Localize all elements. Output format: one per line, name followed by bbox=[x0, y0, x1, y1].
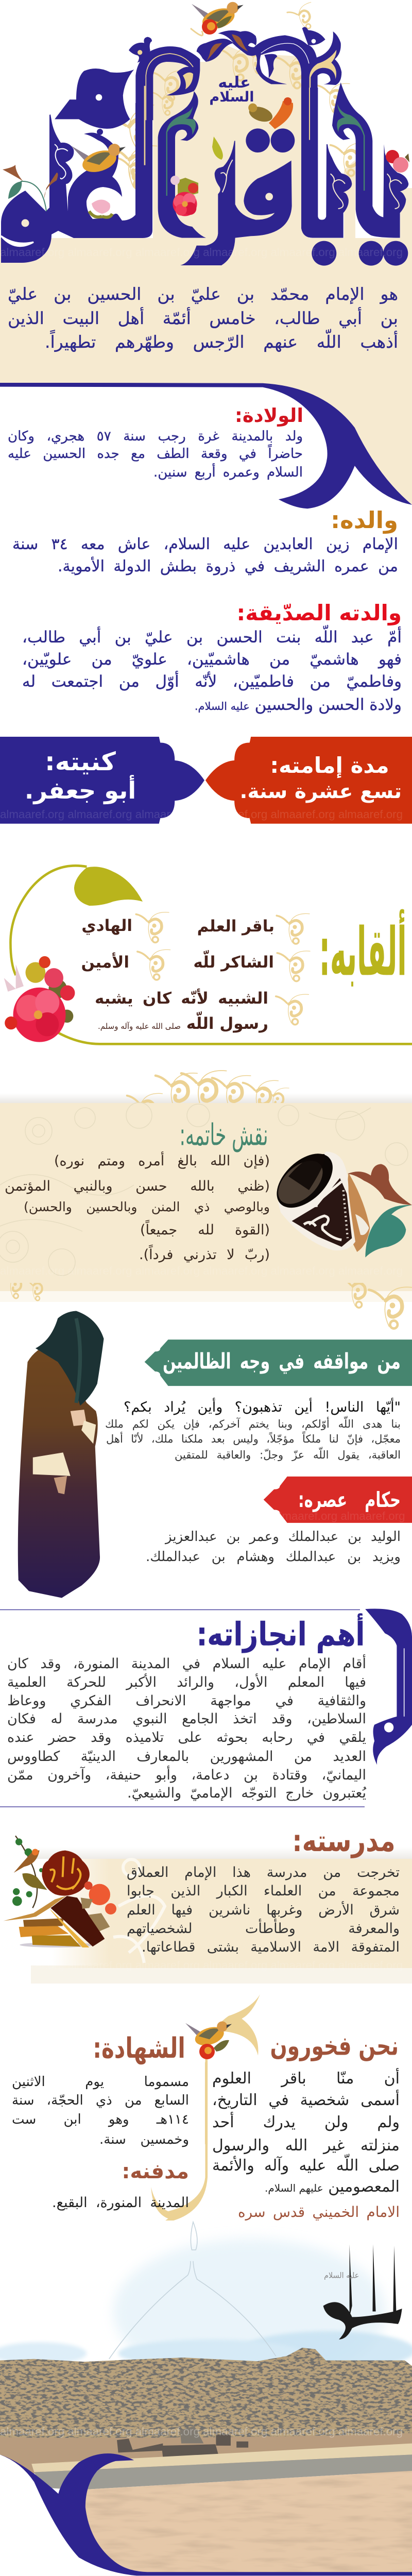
panel: achievements: يلقي في رحابه بحوثه على تلاميذه وقد حضر عنده bbox=[7, 1730, 366, 1745]
leaves bbox=[348, 1164, 412, 1205]
watermark: almaaref.org almaaref.org almaaref.org almaaref.org almaaref.org almaaref.org bbox=[0, 1959, 403, 1972]
sand bbox=[79, 2471, 412, 2575]
green banner bbox=[145, 1340, 412, 1386]
red banner bbox=[205, 737, 412, 824]
tan divider tail bbox=[151, 2057, 208, 2247]
panel: hero calligraphy and introduction: بن أبي طالب، خامس أئمّة أهل البيت الذين bbox=[8, 308, 398, 328]
panel: achievements bbox=[0, 1608, 412, 1807]
panel: ring inscription: وبالوصي ذي المنن وبالحسين والحسن) bbox=[24, 1199, 270, 1214]
panel: his school bbox=[0, 1824, 412, 1984]
panel: martyrdom, burial and pride: المعصومين عليهم السلام. bbox=[265, 2178, 400, 2196]
panel: titles: الشاكر للّه bbox=[193, 953, 274, 972]
panel: father bbox=[12, 506, 398, 575]
cream backdrop bbox=[0, 44, 412, 384]
ring text: (فإن الله بالغ أمره ومتم نوره) bbox=[54, 1153, 270, 1169]
alayhi al-salam inscription: السلام bbox=[209, 89, 254, 105]
letter group left bbox=[1, 103, 152, 263]
calligraphy bbox=[323, 2244, 402, 2340]
cream ground bbox=[0, 1103, 412, 1291]
panel: stances and rulers: ويزيد بن عبدالملك وهشام بن عبدالملك. bbox=[146, 1549, 401, 1565]
heading: ring inscription: نقش خاتمه: bbox=[180, 1118, 268, 1153]
panel: achievements: فيها المعلم الأول، والرائد الأكبر للحركة العلمية bbox=[7, 1674, 366, 1690]
heading: father: والده: bbox=[331, 506, 398, 534]
graves bbox=[117, 2426, 248, 2458]
alayhi al-salam inscription bbox=[209, 74, 254, 105]
panel: Baqi cemetery scene bbox=[0, 2221, 412, 2576]
olive frame bbox=[10, 866, 412, 1044]
white lower left bbox=[0, 2454, 136, 2575]
quote: "أيّها الناس! أين تذهبون؟ وأين يُراد بكم؟ bbox=[124, 1399, 401, 1415]
heading: stances: من مواقفه في وجه الظالمين bbox=[163, 1349, 401, 1375]
panel: stances and rulers: معجّل، فإنّ لنا ملكاً مؤجّلاً، وليس بعد ملكنا ملك، لأنّا أهل bbox=[106, 1433, 401, 1445]
watermark: almaaref.org almaaref.org almaaref.org almaaref.org almaaref.org almaaref.org bbox=[0, 2425, 403, 2438]
crown and arches bbox=[129, 27, 341, 120]
small bird and flower bbox=[185, 2021, 232, 2059]
birds and flowers bbox=[71, 2, 409, 217]
heading: burial: مدفنه: bbox=[122, 2160, 189, 2183]
panel: mother: ولادة الحسن والحسين عليه السلام. bbox=[195, 696, 402, 714]
big calligraphic letters bbox=[1, 27, 408, 266]
panel: achievements: يُعتبرون خارج التوجّه الإماميّ والشيعيّ. bbox=[127, 1785, 366, 1801]
panel: martyrdom, burial and pride: أسمى شخصية في التاريخ، bbox=[212, 2091, 400, 2109]
stone wall bbox=[0, 2348, 412, 2438]
panel: stances and rulers bbox=[10, 1283, 412, 1598]
heading: achievements: أهم انجازاته: bbox=[197, 1616, 365, 1653]
title items: باقر العلم bbox=[197, 917, 274, 936]
panel: stances and rulers: بنا هدى اللّه أوّلكم، وبنا يختم آخركم، فإن يكن لكم ملك bbox=[105, 1418, 401, 1430]
panel: martyrdom, burial and pride: السابع من ذي الحجّة، سنة bbox=[12, 2093, 189, 2108]
panel: titles: الشبيه لأنّه كان يشبه bbox=[95, 989, 268, 1008]
panel: titles bbox=[4, 865, 412, 1045]
father text: الإمام زين العابدين عليه السلام، عاش معه ٣٤ سنة bbox=[12, 535, 398, 553]
panel: kunya and imamate banners: تسع عشرة سنة. bbox=[240, 780, 402, 803]
panel: achievements: والثقافية في مواجهة الانحراف الفكري ووعاظ bbox=[7, 1693, 366, 1709]
panel: mother bbox=[22, 600, 402, 714]
curb bbox=[31, 2444, 412, 2472]
corner flourishes bbox=[1, 1273, 411, 1329]
letter ha bbox=[55, 69, 134, 129]
panel: ring inscription bbox=[0, 1070, 412, 1302]
panel: his school: المتفوقة الامة الاسلامية بشتى قطاعاتها. bbox=[142, 1939, 400, 1955]
panel: martyrdom, burial and pride: ولم ولن يدرك أحد bbox=[212, 2113, 400, 2131]
kunya: كنيته: bbox=[45, 747, 116, 776]
watermark: almaaref.org almaaref.org almaaref.org almaaref.org almaaref.org almaaref.org bbox=[0, 1264, 403, 1277]
olive leaf bbox=[74, 867, 143, 906]
figure in robe bbox=[18, 1311, 104, 1598]
watermark: almaaref.org almaaref.org almaaref.org almaaref.org almaaref.org almaaref.org bbox=[0, 808, 403, 821]
dome outline and spire bbox=[109, 2222, 276, 2359]
navy banner bbox=[0, 737, 204, 824]
red banner bbox=[264, 1477, 412, 1523]
white swirls bbox=[113, 1859, 165, 1963]
panel: hero calligraphy and introduction: أذهب اللّه عنهم الرّجس وطهّرهم تطهيراً. bbox=[45, 332, 398, 352]
panel: titles: الهادي bbox=[81, 917, 132, 935]
panel: martyrdom, burial and pride: ١١٤هـ وهو ابن ست bbox=[12, 2112, 189, 2127]
blue dome wash bbox=[0, 2239, 412, 2384]
panel: achievements: اليمانيّ، وقتادة بن دعامة، وأبو حنيفة، وآخرون ممّن bbox=[7, 1767, 366, 1783]
intro text: هو الإمام محمّد بن عليّ بن الحسين بن عليّ bbox=[8, 284, 398, 304]
heading: school: مدرسته: bbox=[292, 1824, 396, 1859]
watermark: almaaref.org almaaref.org almaaref.org almaaref.org almaaref.org almaaref.org bbox=[0, 246, 403, 259]
calligraphy: عليه السلام bbox=[324, 2271, 359, 2280]
shadow fade bbox=[0, 1093, 412, 1104]
burial text: المدينة المنورة، البقيع. bbox=[52, 2195, 189, 2211]
panel: titles: رسول اللّه صلى الله عليه وآله وسلم. bbox=[98, 1014, 268, 1033]
birth text: ولد بالمدينة غرة رجب سنة ٥٧ هجري، وكان bbox=[8, 429, 303, 444]
proud text: أن منّا باقر العلوم bbox=[212, 2070, 400, 2088]
navy swoosh bbox=[0, 2453, 412, 2575]
heading: rulers: حكام عصره: bbox=[298, 1487, 401, 1512]
panel: his school: مجموعة من العلماء الكبار الذين جابوا bbox=[127, 1883, 400, 1899]
middle hook bbox=[55, 86, 206, 238]
school text: تخرجت من مدرسة هذا الإمام العملاق bbox=[127, 1865, 400, 1880]
panel: ring inscription: (ظني بالله حسن وبالنبي المؤتمن bbox=[5, 1178, 270, 1194]
panel: achievements: العديد من المشهورين بالمعارف الدينيّة كطاووس bbox=[7, 1749, 366, 1765]
panel: his school: شرق الأرض وغربها ناشرين فيها العلم bbox=[127, 1902, 400, 1918]
panel shadows bbox=[31, 1847, 412, 1859]
navy corner ornament bbox=[365, 1609, 412, 1765]
cream panel bbox=[52, 1859, 412, 1968]
panel: birth bbox=[0, 383, 412, 509]
heading: birth: الولادة: bbox=[235, 404, 303, 427]
panel: martyrdom, burial and pride: وخمسين سنة. bbox=[99, 2132, 189, 2147]
heading: martyrdom: الشهادة: bbox=[93, 2032, 185, 2064]
ring bbox=[267, 1143, 412, 1258]
panel: achievements: السلاطين، وقد اتخذ الجامع النبوي مدرسة له فكان bbox=[7, 1711, 366, 1727]
attribution: الامام الخميني قدس سره bbox=[238, 2204, 400, 2221]
watermark: almaaref.org almaaref.org bbox=[273, 1510, 405, 1522]
panel: birth: حاضراً في وقعة الطف مع جده الحسين عليه bbox=[8, 446, 303, 462]
flower bouquet bbox=[4, 956, 75, 1042]
green leaf and brown sprig bbox=[3, 165, 58, 211]
heading: proud: نحن فخورون bbox=[270, 2031, 399, 2062]
background flourishes bbox=[107, 2, 366, 189]
navy crescent divider bbox=[0, 383, 412, 509]
road bbox=[34, 2454, 412, 2490]
flourish bullets bbox=[136, 912, 310, 1025]
panel: ring inscription: (القوة لله جميعاً) bbox=[140, 1222, 270, 1238]
imamate duration: مدة إمامته: bbox=[270, 753, 389, 778]
panel: stances and rulers: العاقبة، يقول اللّه عزّ وجلّ: والعاقبة للمتقين bbox=[175, 1449, 401, 1461]
panel: mother: فهو هاشميّ من هاشميّين، علويّ من علويّين، bbox=[22, 650, 402, 669]
panel: titles: الأمين bbox=[81, 953, 129, 972]
panel: martyrdom, burial and pride: منزلته غير الله والرسول bbox=[212, 2137, 400, 2155]
panel: ring inscription: (ربّ لا تذرني فرداً). bbox=[139, 1247, 270, 1263]
martyrdom text: مسموما يوم الاثنين bbox=[12, 2074, 189, 2090]
top flourish bbox=[127, 1071, 289, 1127]
rulers text: الوليد بن عبدالملك وعمر بن عبدالعزيز bbox=[165, 1529, 401, 1545]
heading: titles: ألقابه: bbox=[319, 914, 407, 992]
books and birds illustration bbox=[4, 1836, 116, 1947]
panel: his school: والمعرفة وطأطأت لشخصياتهم bbox=[127, 1921, 400, 1937]
panel: martyrdom, burial and pride bbox=[12, 1994, 400, 2221]
panel: hero calligraphy and introduction bbox=[0, 2, 412, 384]
panel: kunya and imamate banners: أبو جعفر. bbox=[25, 776, 136, 804]
faint floral pattern bbox=[0, 1103, 408, 1276]
panel: martyrdom, burial and pride: صلى اللّه عليه وآله والأئمة bbox=[212, 2157, 400, 2175]
right letters bbox=[180, 82, 408, 266]
ground behind wall bbox=[0, 2429, 412, 2473]
panel: mother: وفاطميّ من فاطميّين، لأنّه أوّل من اجتمعت له bbox=[22, 672, 402, 691]
achievements text: أقام الإمام عليه السلام في المدينة المنورة، وقد كان bbox=[7, 1656, 366, 1672]
alayhi al-salam inscription: عليه bbox=[218, 74, 251, 92]
heading: mother: والدته الصدّيقة: bbox=[237, 600, 402, 625]
panel: birth: السلام وعمره أربع سنين. bbox=[153, 465, 303, 480]
panel: father: من عمره الشريف في ذروة بطش الدولة الأموية. bbox=[58, 557, 398, 575]
panel: kunya and imamate banners bbox=[0, 737, 412, 824]
tan flame leaf bbox=[205, 1994, 260, 2144]
mother text: أمّ عبد اللّه بنت الحسن بن عليّ بن أبي طالب، bbox=[22, 628, 402, 647]
